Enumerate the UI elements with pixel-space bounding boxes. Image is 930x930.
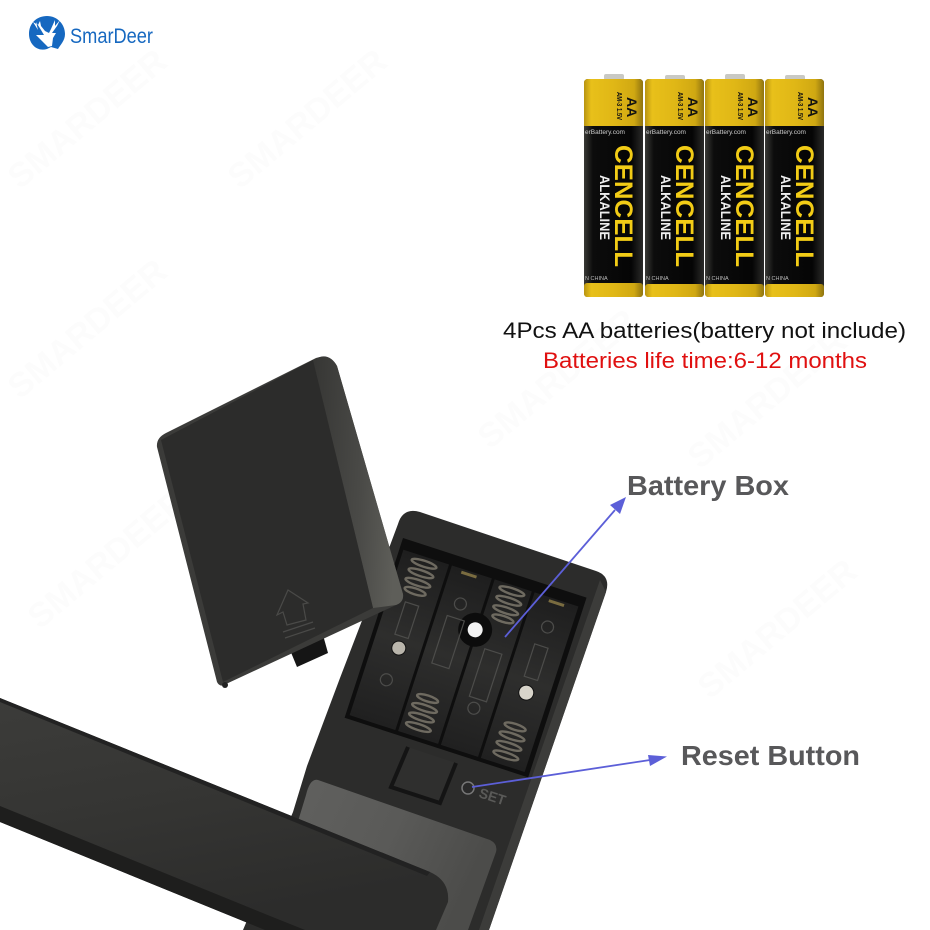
cover tab — [290, 635, 328, 667]
body shell — [243, 511, 607, 930]
battery 4 — [765, 75, 824, 297]
battery 1: N CHINA — [585, 276, 608, 282]
battery 2: CENCELL — [670, 145, 698, 267]
battery 4: AM-3 1.5V — [796, 92, 803, 120]
battery compartment — [345, 538, 587, 777]
text: SMARDEER — [221, 42, 394, 196]
right bevel — [479, 580, 606, 930]
central hole — [454, 608, 497, 651]
battery 1 — [584, 74, 643, 297]
label: reset button: Reset Button — [681, 740, 860, 771]
battery 3: ALKALINE — [718, 175, 734, 240]
caption: battery life: Batteries life time:6-12 months — [543, 348, 867, 373]
battery 2: ALKALINE — [658, 175, 674, 240]
battery 2: erBattery.com — [646, 129, 686, 136]
slot below compartment — [391, 747, 456, 803]
text: SMARDEER — [1, 42, 174, 196]
text: SMARDEER — [691, 552, 864, 706]
SET label: SET — [477, 785, 508, 808]
batteries: four AA cells — [584, 74, 824, 297]
text: SMARDEER — [681, 322, 854, 476]
battery 4: erBattery.com — [766, 129, 806, 136]
spring bottom left — [405, 692, 441, 734]
battery 4: AA — [805, 97, 821, 117]
lock body with battery compartment — [243, 511, 607, 930]
battery 1: AM-3 1.5V — [615, 92, 622, 120]
contact plates — [461, 571, 564, 607]
battery 1: AA — [624, 97, 640, 117]
battery 4: N CHINA — [766, 276, 789, 282]
door handle — [0, 698, 448, 930]
cover hinge nub — [222, 682, 228, 688]
reset button — [462, 782, 474, 794]
screw left — [390, 639, 408, 657]
battery 3: AM-3 1.5V — [736, 92, 743, 120]
icon: embossed arrow — [277, 590, 315, 638]
battery 3: AA — [745, 97, 761, 117]
battery 3: CENCELL — [730, 145, 758, 267]
caption: battery type: 4Pcs AA batteries(battery not include) — [503, 318, 906, 343]
battery 1: CENCELL — [609, 145, 637, 267]
battery 1: erBattery.com — [585, 129, 625, 136]
text: SMARDEER — [21, 482, 194, 636]
battery 3 — [705, 74, 764, 297]
icon: deer head in blue circle — [29, 16, 65, 50]
text: SMARDEER — [1, 252, 174, 406]
spring top centre — [490, 584, 525, 626]
handle body — [0, 698, 448, 930]
battery 2: AA — [685, 97, 701, 117]
battery cover — [157, 356, 403, 688]
polarity embossing — [379, 577, 556, 730]
cover face — [161, 360, 373, 682]
brand name: SmarDeer — [70, 25, 153, 48]
brushed plate — [265, 780, 496, 930]
battery 1: ALKALINE — [597, 175, 613, 240]
battery 4: CENCELL — [790, 145, 818, 267]
arrow: reset button — [472, 755, 667, 787]
battery 2: AM-3 1.5V — [676, 92, 683, 120]
spring bottom right — [493, 720, 528, 762]
screw right — [517, 683, 536, 702]
battery 4: ALKALINE — [778, 175, 794, 240]
battery 2: N CHINA — [646, 276, 669, 282]
label: battery box: Battery Box — [627, 470, 789, 501]
battery 2 — [645, 75, 704, 297]
logo: SmarDeer — [29, 16, 153, 50]
battery 3: erBattery.com — [706, 129, 746, 136]
spring top left — [402, 557, 437, 598]
handle groove — [0, 806, 305, 930]
handle top edge — [0, 698, 430, 876]
cover side band — [313, 356, 403, 608]
cover shell — [157, 357, 403, 686]
battery 3: N CHINA — [706, 276, 729, 282]
text: SMARDEER — [471, 302, 644, 456]
arrow: battery box — [505, 497, 626, 637]
